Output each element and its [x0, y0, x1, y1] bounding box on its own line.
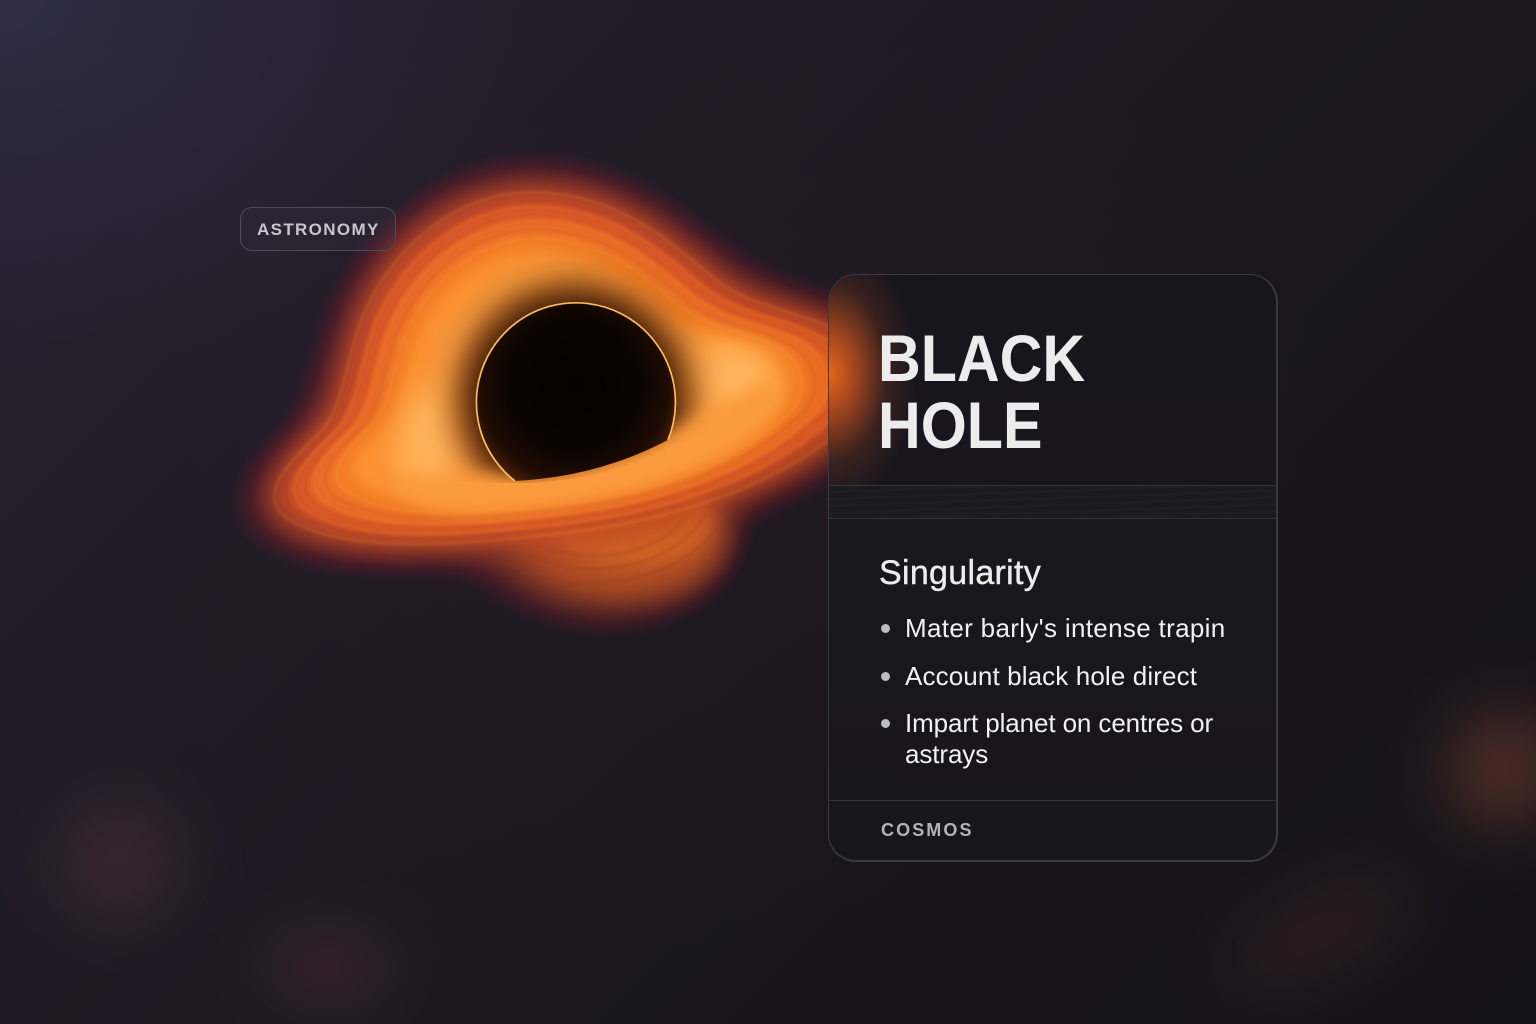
bullet list: Account black hole direct: [905, 661, 1197, 691]
bullet 3: [881, 708, 1213, 769]
footer label: COSMOS: [881, 820, 974, 840]
inner shadow around hole: [446, 270, 702, 526]
disc streaks: [274, 192, 873, 544]
subheading: Singularity: [879, 554, 1041, 592]
tag: astronomy: [240, 207, 396, 251]
bullet 1: [881, 613, 1226, 643]
title: [878, 321, 1085, 462]
title: HOLE: [878, 388, 1042, 462]
bullet list: astrays: [905, 739, 988, 769]
textured divider band: [829, 485, 1276, 519]
outer halo: [232, 161, 921, 566]
title: BLACK: [878, 321, 1085, 395]
photon ring: [476, 303, 675, 481]
bullet list: Mater barly's intense trapin: [905, 613, 1226, 643]
event horizon: [476, 303, 675, 481]
panel: info card: [828, 274, 1278, 862]
lower lensed lobe: [480, 467, 730, 623]
bullet 2: [881, 661, 1197, 691]
bullet list: [881, 613, 1226, 769]
tag label: ASTRONOMY: [257, 220, 380, 239]
black hole: [412, 255, 777, 519]
bullet list: Impart planet on centres or: [905, 708, 1213, 738]
disc layers: [263, 184, 886, 550]
footer divider: [829, 800, 1276, 801]
front of disc passing over the hole: [390, 375, 780, 512]
